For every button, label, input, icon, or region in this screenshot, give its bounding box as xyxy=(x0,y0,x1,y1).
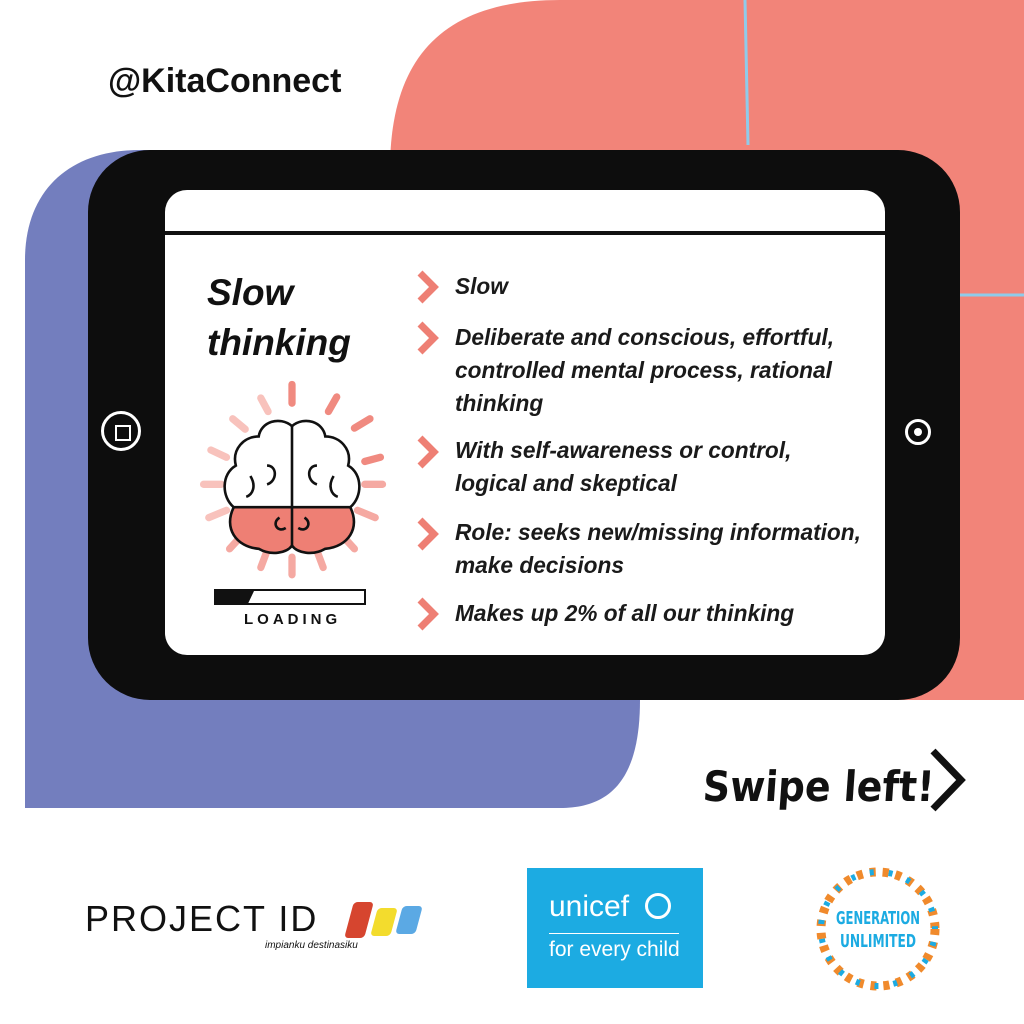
text: make decisions xyxy=(455,552,624,578)
heading: slow thinking: thinking xyxy=(207,322,351,363)
bullet text: Slow xyxy=(455,273,508,299)
text: thinking xyxy=(455,390,543,416)
logo: project id: PROJECT ID xyxy=(85,898,318,939)
arrow xyxy=(930,748,966,812)
swipe left: Swipe left! xyxy=(701,762,936,811)
home button left xyxy=(101,411,141,451)
salmon blob xyxy=(390,0,1024,700)
handle: @KitaConnect xyxy=(108,62,341,100)
text: Deliberate and conscious, effortful, xyxy=(455,324,834,350)
logo: unicef: unicef xyxy=(549,890,629,923)
logo: unicef xyxy=(527,868,703,988)
loading label: LOADING xyxy=(244,611,341,628)
screen top line xyxy=(165,231,885,235)
heading: slow thinking xyxy=(207,272,351,363)
heading: slow thinking: Slow xyxy=(207,272,293,313)
logo: generation unlimited xyxy=(816,868,940,990)
screen xyxy=(165,190,885,655)
text: logical and skeptical xyxy=(455,470,677,496)
logo: generation unlimited: UNLIMITED xyxy=(840,931,916,952)
text: Role: seeks new/missing information, xyxy=(455,519,861,545)
loading bar xyxy=(214,589,366,605)
tablet xyxy=(88,150,960,700)
text: Makes up 2% of all our thinking xyxy=(455,600,794,626)
text: controlled mental process, rational xyxy=(455,357,832,383)
blue lines xyxy=(745,0,1024,295)
logo: unicef: for every child xyxy=(549,938,680,961)
text: With self-awareness or control, xyxy=(455,437,791,463)
purple blob xyxy=(25,150,640,808)
camera right xyxy=(905,419,931,445)
bullet chevrons xyxy=(418,270,439,630)
logo: project id xyxy=(85,898,422,951)
logo: project id: impianku destinasiku xyxy=(265,940,358,951)
icon: brain with rays xyxy=(200,380,386,578)
logo: generation unlimited: GENERATION xyxy=(836,908,920,929)
